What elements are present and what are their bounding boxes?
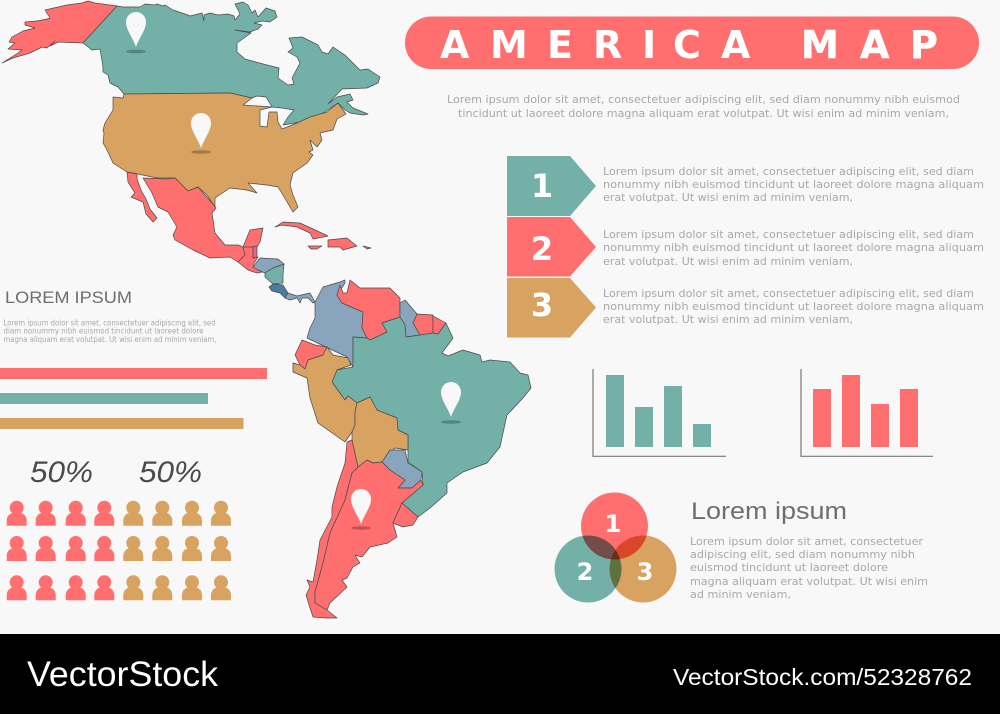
venn heading: Lorem ipsum: [691, 498, 847, 525]
country: Suriname: [413, 314, 433, 335]
venn text: adipiscing elit, sed diam nonummy nibh: [690, 549, 915, 561]
text for step 3: [603, 288, 984, 326]
text for step 1: [603, 166, 984, 204]
text for step 1: nonummy nibh euismod tincidunt ut laoreet dolore magna aliquam: [603, 179, 984, 191]
footer bar: [0, 634, 1000, 714]
country: Guatemala and El Salvador: [238, 247, 262, 273]
country: Paraguay: [382, 450, 422, 488]
country: Uruguay: [393, 503, 418, 527]
text for step 3: erat volutpat. Ut wisi enim ad minim veniam,: [603, 314, 853, 326]
map pin: Argentina: [351, 489, 371, 530]
country: Venezuela: [337, 280, 400, 340]
left heading: LOREM IPSUM: [5, 288, 132, 307]
country: Colombia: [307, 280, 367, 367]
text for step 2: Lorem ipsum dolor sit amet, consectetuer adipiscing elit, sed diam: [603, 229, 974, 241]
country: French Guiana: [433, 316, 446, 334]
left text: [4, 318, 216, 344]
venn text: [690, 536, 928, 601]
arrow step 3: [507, 278, 596, 338]
intro text: tincidunt ut laoreet dolore magna aliquam erat volutpat. Ut wisi enim ad minim veniam,: [458, 108, 949, 120]
title banner: AMERICA: [440, 23, 751, 67]
map pin: United States: [191, 113, 211, 154]
text for step 1: erat volutpat. Ut wisi enim ad minim veniam,: [603, 192, 853, 204]
bar chart: red: [801, 369, 933, 456]
islands: Caribbean: [275, 222, 371, 250]
left text: diam nonummy nibh euismod tincidunt ut laoreet dolore: [4, 326, 204, 336]
title banner: [405, 16, 979, 69]
country: Argentina: [315, 460, 423, 610]
venn diagram: 2: [577, 558, 593, 586]
venn diagram: 1: [605, 510, 621, 538]
country: Chile: [306, 440, 358, 618]
country: Mexico: [127, 172, 263, 262]
country: Bolivia: [352, 397, 408, 467]
intro text: Lorem ipsum dolor sit amet, consectetuer adipiscing elit, sed diam nonummy nibh euismod: [447, 94, 960, 106]
country: Honduras: [253, 258, 284, 273]
horizontal bars: [0, 368, 267, 429]
percent label left: 50%: [30, 456, 93, 489]
country: Ecuador: [295, 340, 327, 369]
country: Alaska: [2, 1, 117, 63]
text for step 2: [603, 229, 984, 268]
venn diagram: 3: [637, 558, 653, 586]
footer bar: VectorStock: [27, 655, 219, 694]
country: United States: [103, 93, 346, 212]
left text: magna aliquam erat volutpat. Ut wisi enim ad minim veniam,: [4, 335, 216, 344]
footer bar: VectorStock.com/52328762: [673, 664, 972, 690]
country: Nicaragua: [265, 264, 284, 284]
percent label right: 50%: [139, 456, 202, 489]
venn text: Lorem ipsum dolor sit amet, consectetuer: [690, 536, 924, 548]
country: Brazil: [332, 317, 531, 517]
text for step 1: Lorem ipsum dolor sit amet, consectetuer adipiscing elit, sed diam: [603, 166, 974, 178]
venn diagram: [554, 492, 676, 602]
arrow step 2: 2: [531, 230, 553, 268]
venn text: magna aliquam erat volutpat. Ut wisi enim: [690, 576, 928, 588]
country: Canada: [83, 2, 380, 125]
arrow step 3: 3: [531, 286, 553, 324]
map of the Americas: [2, 1, 531, 618]
country: Guyana: [400, 300, 420, 337]
text for step 2: erat volutpat. Ut wisi enim ad minim veniam,: [603, 256, 853, 268]
venn text: euismod tincidunt ut laoreet dolore: [690, 562, 888, 574]
bar chart: teal: [593, 369, 726, 456]
intro text: [447, 94, 960, 120]
text for step 3: Lorem ipsum dolor sit amet, consectetuer adipiscing elit, sed diam: [603, 288, 974, 300]
map pin: Canada: [126, 12, 146, 53]
title banner: MAP: [801, 23, 938, 67]
country: Costa Rica: [269, 284, 288, 298]
left text: Lorem ipsum dolor sit amet, consectetuer adipiscing elit, sed: [4, 318, 216, 328]
people pictogram: [7, 501, 231, 600]
arrow step 1: [507, 156, 596, 216]
text for step 3: nonummy nibh euismod tincidunt ut laoreet dolore magna aliquam: [603, 301, 984, 313]
country: Panama: [285, 293, 315, 303]
country: Peru: [293, 347, 357, 442]
venn text: ad minim veniam,: [690, 589, 791, 601]
arrow step 2: [507, 217, 596, 276]
text for step 2: nonummy nibh euismod tincidunt ut laoreet dolore magna aliquam: [603, 242, 984, 254]
map pin: Brazil: [441, 382, 461, 424]
country: Belize: [253, 246, 257, 258]
arrow step 1: 1: [531, 167, 553, 205]
